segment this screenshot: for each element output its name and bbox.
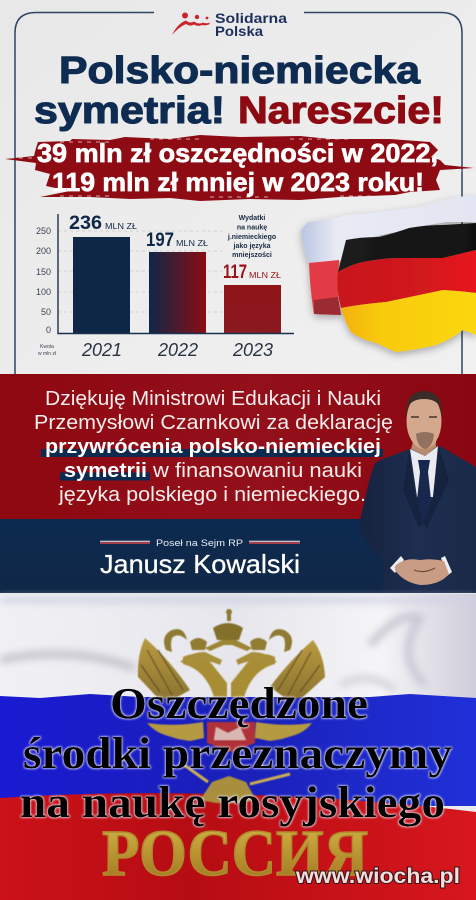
quote text: Dziękuję Ministrowi Edukacji i Nauki bbox=[45, 388, 381, 410]
bar 2021 bbox=[73, 237, 130, 333]
flag folds bbox=[0, 600, 476, 690]
highlight under bold text bbox=[41, 449, 383, 480]
brush strip with subheading bbox=[5, 135, 474, 201]
role label with rules: Poseł na Sejm RP bbox=[156, 538, 243, 548]
heading: symetria! bbox=[34, 90, 225, 132]
tail bbox=[200, 776, 256, 803]
icon: logo figures bbox=[172, 12, 210, 35]
shield rider bbox=[214, 727, 246, 740]
flags bbox=[301, 195, 476, 352]
red stripe bbox=[0, 793, 476, 900]
crown stem bbox=[227, 613, 231, 621]
top panel background bbox=[0, 0, 476, 374]
name band bbox=[0, 519, 476, 593]
panel frame bbox=[15, 12, 462, 374]
red brush stroke bbox=[5, 135, 474, 201]
caption: środki przeznaczymy bbox=[23, 729, 452, 778]
right wing bbox=[270, 640, 325, 700]
x axis years: 2022 bbox=[157, 340, 198, 360]
x axis years: 2023 bbox=[232, 340, 273, 360]
name: Janusz Kowalski bbox=[100, 549, 300, 579]
right ribbon bbox=[269, 629, 292, 652]
value 2021: 236 bbox=[69, 213, 102, 234]
lower right wing bbox=[255, 722, 312, 741]
sceptre bbox=[180, 762, 290, 784]
emblem: double-headed eagle bbox=[138, 609, 325, 803]
quote text: Przemysłowi Czarnkowi za deklarację bbox=[34, 412, 393, 434]
left wing bbox=[138, 638, 190, 700]
grid lines bbox=[58, 231, 225, 312]
logo wordmark: Solidarna bbox=[215, 10, 287, 26]
value 2023: MLN ZŁ bbox=[249, 270, 281, 280]
brush streaks bbox=[10, 139, 470, 197]
value 2022: MLN ZŁ bbox=[176, 238, 208, 248]
lower left wing bbox=[147, 722, 204, 741]
chart note: jako języka bbox=[233, 243, 271, 250]
hands bbox=[395, 559, 449, 585]
shield bbox=[207, 722, 255, 752]
chart note: j.niemieckiego bbox=[227, 234, 276, 241]
quote band bbox=[0, 374, 476, 519]
bar chart bbox=[36, 213, 294, 360]
shirt cuffs bbox=[390, 556, 452, 576]
portrait: man in suit bbox=[360, 391, 476, 593]
chart note: na naukę bbox=[237, 224, 267, 232]
heading: Nareszcie! bbox=[238, 90, 444, 132]
axes bbox=[58, 214, 294, 334]
quote text: symetrii bbox=[64, 460, 147, 482]
centre crown bbox=[213, 623, 243, 640]
right crown bbox=[250, 638, 267, 650]
quote text: w finansowaniu nauki bbox=[152, 460, 362, 482]
white stripe bbox=[0, 594, 476, 706]
tie bbox=[417, 460, 431, 523]
polish flag bbox=[301, 195, 476, 315]
value 2021: MLN ZŁ bbox=[105, 221, 137, 231]
left crown bbox=[190, 638, 207, 650]
x axis caption: w mln zł bbox=[38, 351, 57, 357]
chart note: mniejszości bbox=[232, 252, 272, 259]
logo: Solidarna Polska bbox=[172, 10, 287, 39]
y axis labels: 50 bbox=[41, 307, 51, 317]
right wing feathers bbox=[278, 650, 320, 695]
lapel shadows bbox=[403, 447, 449, 528]
chart note: Wydatki bbox=[239, 215, 265, 222]
caption: na naukę rosyjskiego bbox=[20, 778, 445, 827]
blue stripe bbox=[0, 694, 476, 806]
right neck bbox=[231, 654, 275, 697]
caption: Oszczędzone bbox=[110, 679, 368, 728]
value 2022: 197 bbox=[146, 230, 174, 251]
crown link bbox=[205, 640, 252, 651]
left wing feathers bbox=[141, 650, 183, 695]
y axis labels: 250 bbox=[36, 226, 51, 236]
left neck bbox=[183, 654, 227, 697]
subheading text: 119 mln zł mniej w 2023 roku! bbox=[52, 167, 424, 197]
neck bbox=[411, 438, 436, 456]
quote text: języka polskiego i niemieckiego. bbox=[58, 484, 366, 506]
head bbox=[406, 393, 442, 449]
russia wordmark: РОССИЯ bbox=[102, 817, 368, 890]
y axis labels: 100 bbox=[36, 287, 51, 297]
shirt bbox=[410, 446, 438, 497]
x axis years: 2021 bbox=[81, 340, 122, 360]
y axis labels: 150 bbox=[36, 267, 51, 277]
eyes and brows bbox=[411, 416, 437, 418]
russian flag background bbox=[0, 594, 476, 900]
quote text: przywrócenia polsko-niemieckiej bbox=[45, 436, 381, 458]
left head band bbox=[180, 652, 222, 665]
right head band bbox=[236, 652, 277, 665]
crown finial bbox=[226, 609, 232, 615]
x axis caption: Kwota bbox=[40, 344, 54, 350]
left ribbon bbox=[164, 629, 187, 652]
bar 2022 bbox=[149, 252, 206, 333]
german flag bbox=[337, 223, 476, 352]
y axis labels: 0 bbox=[46, 325, 51, 335]
beard and mouth bbox=[416, 432, 434, 449]
subheading text: 39 mln zł oszczędności w 2022, bbox=[37, 138, 438, 168]
suit bbox=[360, 446, 476, 593]
y axis labels: 200 bbox=[36, 246, 51, 256]
heading: Polsko-niemiecka bbox=[59, 50, 421, 92]
logo wordmark: Polska bbox=[215, 23, 263, 39]
bar 2023 bbox=[224, 285, 281, 333]
watermark: www.wiocha.pl bbox=[295, 865, 460, 888]
hair bbox=[406, 391, 442, 418]
value 2023: 117 bbox=[223, 262, 247, 283]
